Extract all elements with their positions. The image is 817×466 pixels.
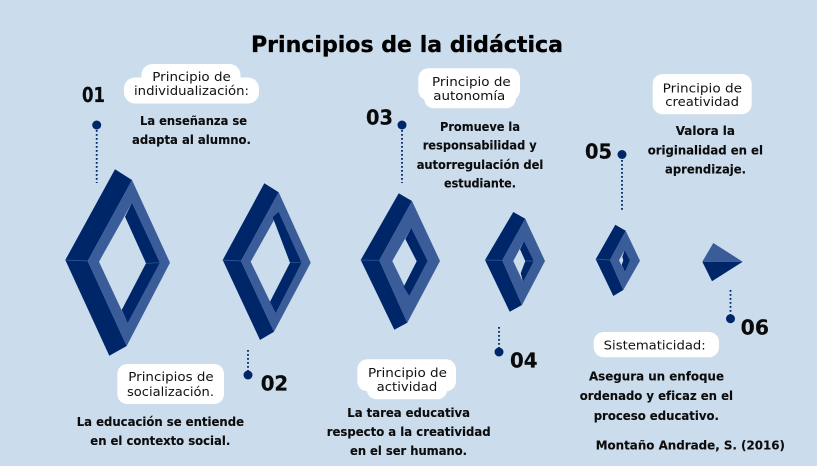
bubble: sistematicidad: Sistematicidad:: [604, 337, 706, 352]
pyramid 6: [702, 243, 743, 281]
text: sistematicidad: proceso educativo.: [594, 409, 719, 423]
diamond 3: [361, 193, 440, 330]
bubble: autonomía: autonomía: [433, 88, 505, 103]
marker 03: 03: [366, 106, 393, 130]
marker 01: 01: [82, 83, 105, 107]
text: actividad: respecto a la creatividad: [327, 425, 491, 439]
text: sistematicidad: ordenado y eficaz en el: [580, 389, 733, 403]
text: creatividad: Valora la: [676, 124, 735, 138]
bubble: creatividad: [653, 74, 752, 114]
text: actividad: [327, 406, 491, 458]
bubble: actividad: actividad: [377, 379, 437, 394]
text: actividad: La tarea educativa: [347, 406, 470, 420]
diamond 1: [65, 169, 170, 356]
text: creatividad: originalidad en el: [648, 143, 763, 157]
bubble: creatividad: creatividad: [665, 94, 739, 109]
marker 02: [244, 350, 288, 396]
bubble: sistematicidad: [594, 332, 719, 357]
text: creatividad: [648, 124, 763, 176]
text: socialización: La educación se entiende: [77, 415, 244, 429]
marker 01: [82, 83, 105, 183]
bubble: individualización: individualización:: [134, 83, 249, 98]
bubble: actividad: Principio de: [368, 365, 447, 380]
diamond 5: [596, 225, 640, 296]
bubble: socialización: socialización.: [127, 384, 214, 399]
marker 02: 02: [261, 372, 288, 396]
text: autonomía: Promueve la: [440, 120, 520, 134]
marker 05: 05: [585, 139, 612, 163]
text: individualización: [132, 114, 251, 147]
text: socialización: en el contexto social.: [90, 434, 230, 448]
text: autonomía: estudiante.: [444, 176, 516, 190]
marker 04: [494, 327, 538, 372]
citation: Montaño Andrade, S. (2016): [596, 438, 785, 452]
marker 04: 04: [510, 348, 538, 372]
bubble: socialización: [117, 364, 224, 404]
bubble: individualización: Principio de: [152, 69, 231, 84]
diamond 4: [485, 212, 545, 312]
text: socialización: [77, 415, 244, 448]
text: sistematicidad: Asegura un enfoque: [589, 370, 724, 384]
marker 05: [585, 139, 626, 212]
bubble: autonomía: Principio de: [432, 74, 511, 89]
bubble: autonomía: [418, 68, 520, 108]
text: sistematicidad: [580, 370, 733, 423]
text: autonomía: autorregulación del: [417, 158, 543, 172]
bubble: creatividad: Principio de: [663, 80, 742, 95]
bubble: socialización: Principios de: [128, 369, 214, 384]
marker 03: [366, 106, 406, 183]
text: autonomía: responsabilidad y: [423, 138, 537, 152]
diamond 2: [223, 183, 311, 340]
text: autonomía: [417, 120, 543, 190]
title: Principios de la didáctica: [251, 32, 563, 58]
bubble: actividad: [357, 359, 456, 399]
text: individualización: La enseñanza se: [140, 114, 247, 128]
marker 06: [726, 290, 769, 340]
marker 06: 06: [741, 316, 769, 340]
text: creatividad: aprendizaje.: [665, 162, 746, 176]
text: individualización: adapta al alumno.: [132, 133, 251, 147]
bubble: individualización: [124, 64, 259, 104]
text: actividad: en el ser humano.: [350, 444, 467, 458]
